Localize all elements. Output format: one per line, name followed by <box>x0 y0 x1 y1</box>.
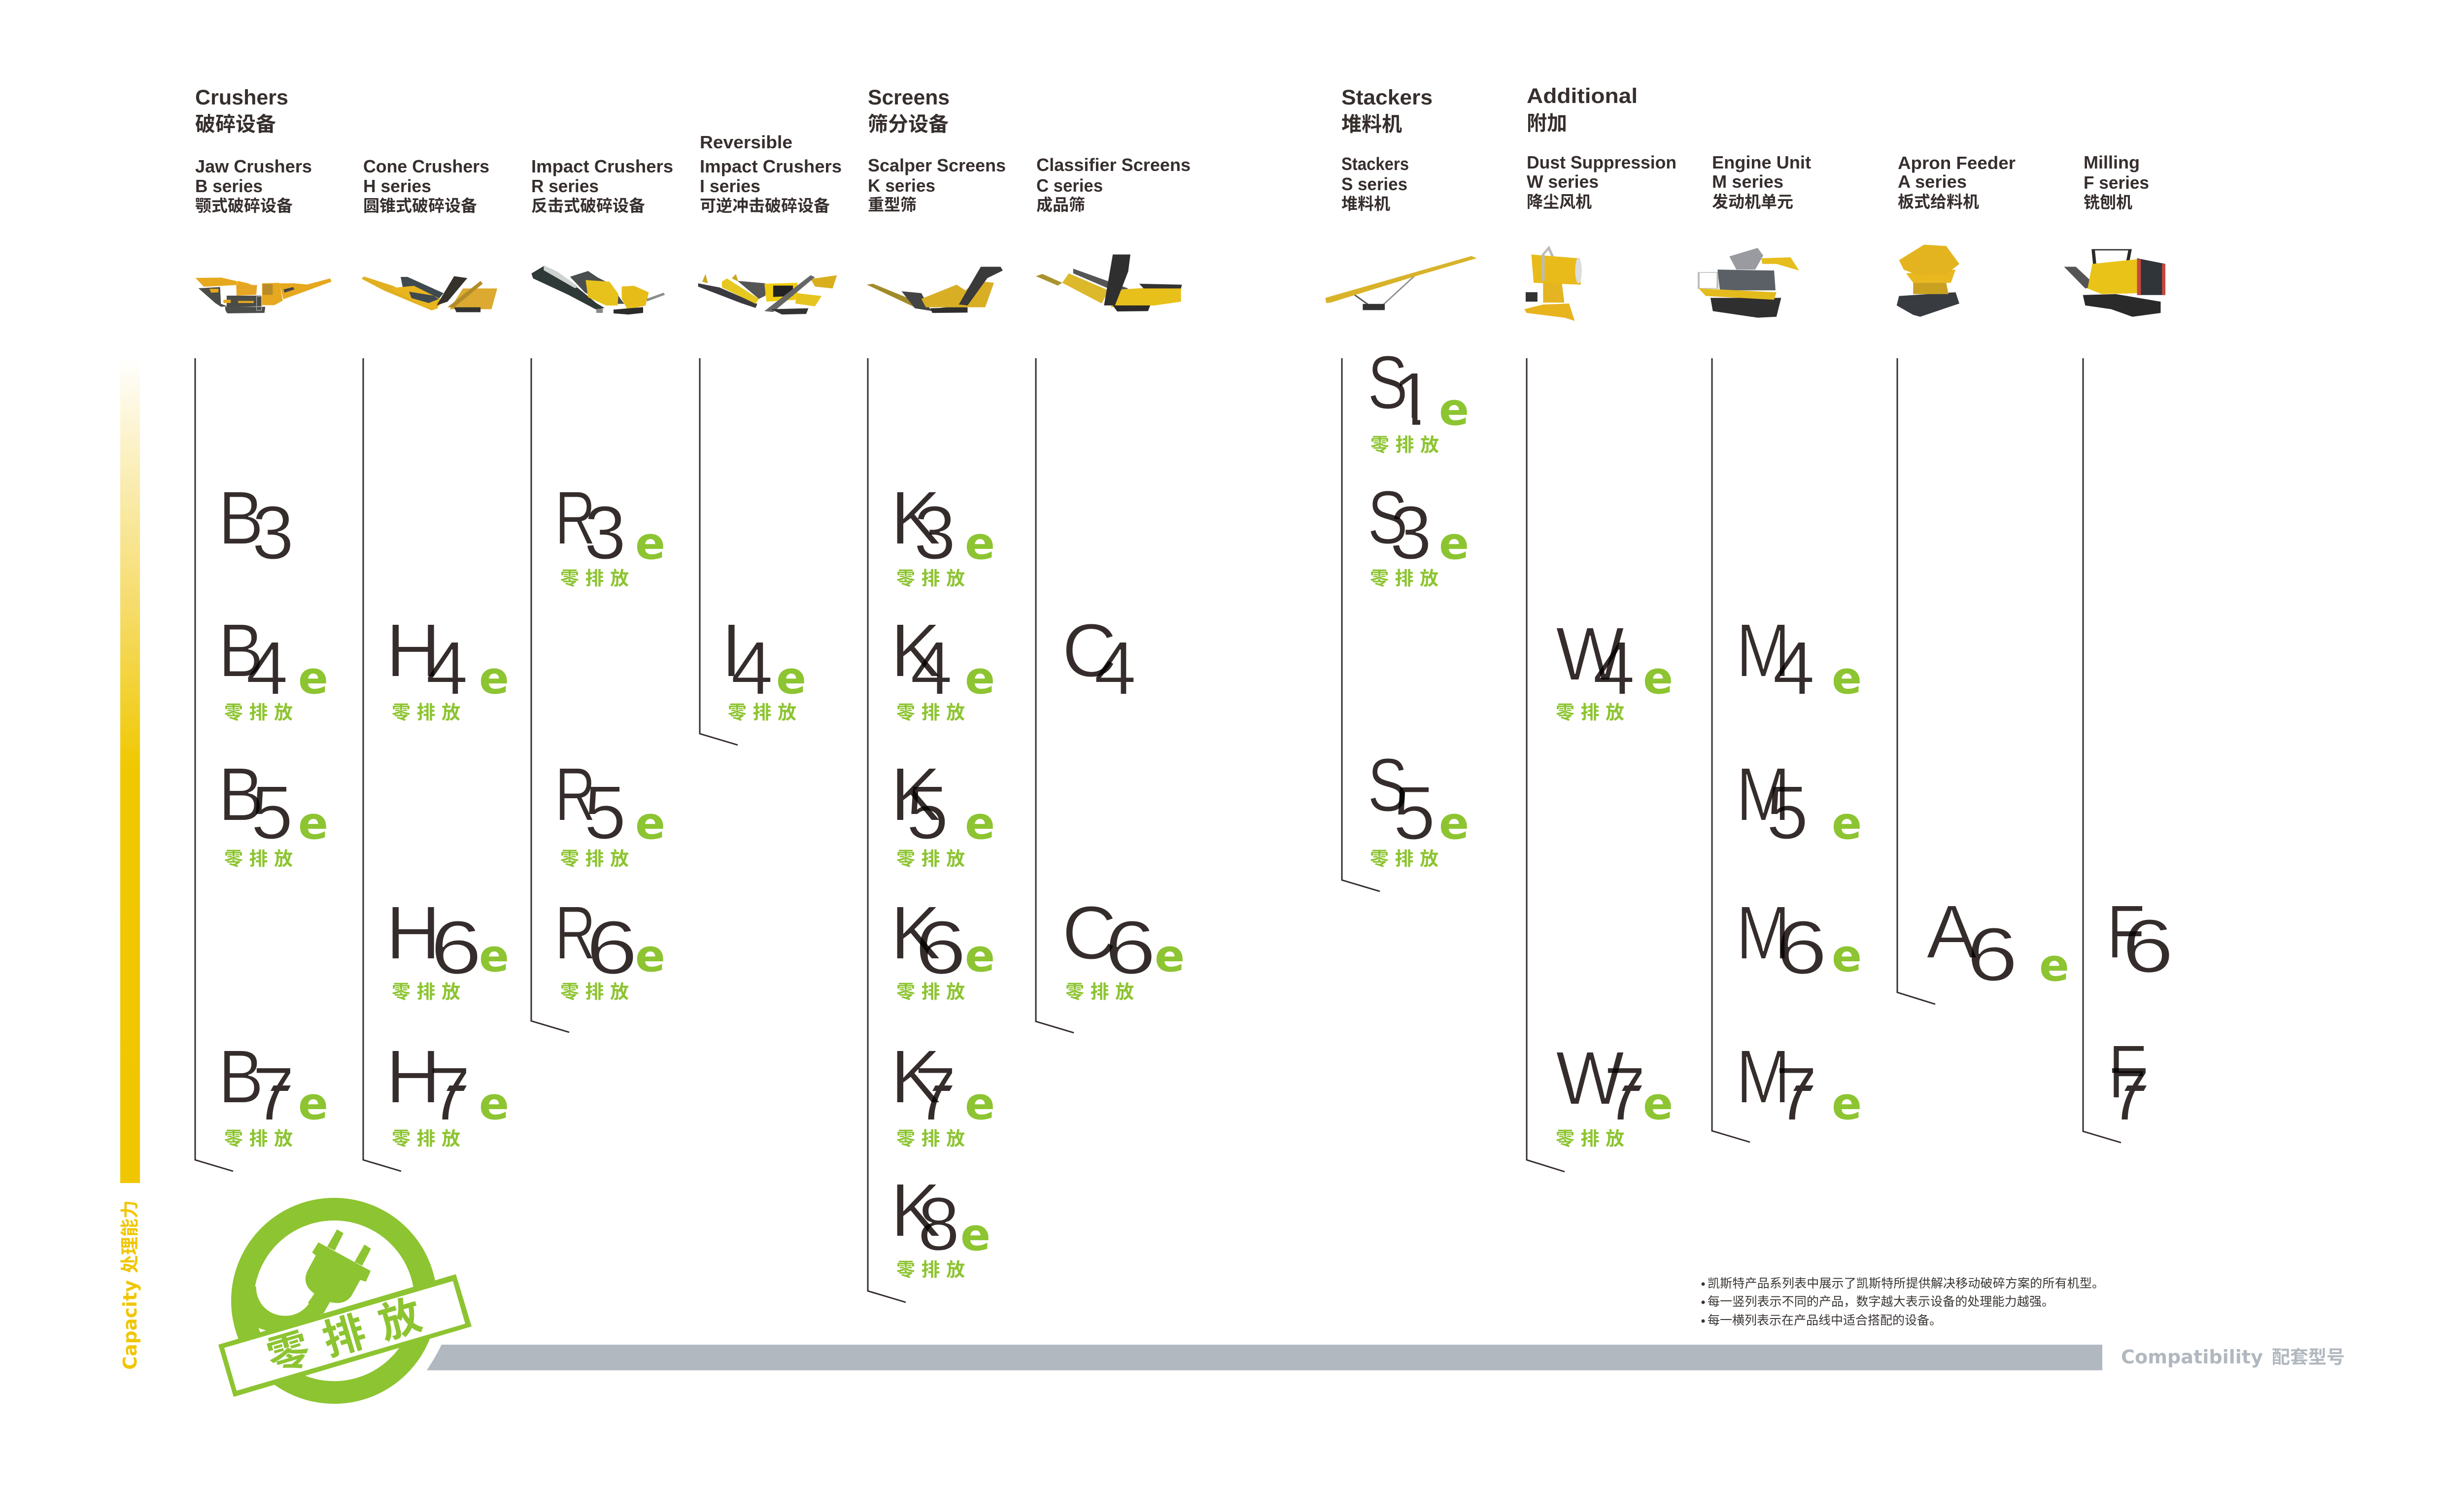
heading: Additional <box>1527 84 1638 135</box>
model: F7: 7 <box>2108 1051 2150 1136</box>
heading: Screens <box>868 86 950 136</box>
heading: Crushers <box>195 86 288 136</box>
icon: engine unit machine <box>1699 248 1799 318</box>
model: C6: 零排放 <box>1065 982 1140 1003</box>
model: F6: F <box>2107 889 2145 974</box>
model: K5: K <box>890 752 941 837</box>
model: B4: 零排放 <box>224 703 299 723</box>
column bracket: B series <box>195 358 233 1171</box>
column bracket: S series <box>1342 358 1380 891</box>
model: K5: e <box>965 798 995 849</box>
model: K8: 8 <box>918 1182 960 1266</box>
model: R5: 5 <box>584 770 626 855</box>
icon: stacker machine <box>1325 256 1477 310</box>
model: R3: 3 <box>584 490 626 575</box>
model: K4: 4 <box>910 626 953 711</box>
model: B4: B <box>218 608 264 693</box>
model: B4 <box>218 608 328 723</box>
model: F6: 6 <box>2122 904 2174 988</box>
column heading: Apron Feeder <box>1898 153 2016 211</box>
model: S5 <box>1368 743 1469 870</box>
model: I4: I <box>721 608 742 693</box>
column heading: Impact Crushers <box>531 156 673 215</box>
icon: scalper screen machine <box>867 267 1003 313</box>
model: K3: e <box>965 518 995 570</box>
model: S1: S <box>1368 340 1408 425</box>
model: A6 <box>1926 889 2069 997</box>
model: W4: 零排放 <box>1556 703 1631 723</box>
column bracket: F series <box>2083 358 2121 1143</box>
model: I4 <box>721 608 806 723</box>
model: K6: K <box>890 890 941 975</box>
model: A6: A <box>1926 889 1977 974</box>
model: S5: S <box>1368 743 1408 827</box>
model: R6: e <box>635 930 665 982</box>
model: R6: R <box>555 890 596 975</box>
model: W7: 7 <box>1604 1051 1646 1136</box>
model: K7 <box>890 1034 995 1150</box>
model: W7: W <box>1556 1036 1624 1120</box>
model: K6: e <box>965 930 995 982</box>
badge text: 零排放 <box>262 1287 443 1382</box>
model: B5: 零排放 <box>224 849 299 870</box>
model: B5: B <box>218 752 264 837</box>
model: K8: e <box>960 1209 991 1261</box>
column heading: Scalper Screens: Scalper Screens <box>868 155 1006 175</box>
model: M4: 4 <box>1773 626 1815 711</box>
model: S3: 3 <box>1390 490 1432 575</box>
model: R5 <box>555 752 665 870</box>
column bracket: M series <box>1712 358 1750 1142</box>
model: R6: 零排放 <box>560 982 635 1003</box>
column heading: Impact Crushers: 反击式破碎设备 <box>531 197 645 215</box>
column heading: Jaw Crushers: 颚式破碎设备 <box>195 197 293 215</box>
model: H6: e <box>479 930 509 982</box>
model: K7: 零排放 <box>896 1129 971 1150</box>
model: B5: 5 <box>251 770 293 855</box>
model: S3: 零排放 <box>1370 569 1445 589</box>
model: M5: 5 <box>1766 770 1809 855</box>
model: K3: 3 <box>914 490 956 575</box>
model: K8: 零排放 <box>896 1260 971 1281</box>
column heading: Apron Feeder: Apron Feeder <box>1898 153 2016 173</box>
column heading: Impact Crushers: Impact Crushers <box>531 156 673 176</box>
model: K7: e <box>965 1078 995 1130</box>
model: M7: 7 <box>1775 1051 1817 1136</box>
heading: Additional: Additional <box>1527 84 1638 108</box>
model: K8 <box>890 1168 991 1281</box>
icon: dust suppression machine <box>1524 248 1582 321</box>
icon: milling machine <box>2064 250 2165 317</box>
model: H6: H <box>386 890 441 975</box>
column heading: Scalper Screens: K series <box>868 175 935 196</box>
column heading: Reversible Impact Crushers: I series <box>700 176 760 196</box>
column heading: Milling: Milling <box>2084 152 2140 172</box>
model: S3: e <box>1439 518 1469 570</box>
column heading: Cone Crushers: 圆锥式破碎设备 <box>363 197 477 215</box>
model: M6: e <box>1832 930 1862 982</box>
panel: screens header <box>868 86 1191 214</box>
model: M5 <box>1736 752 1862 855</box>
model: B7: B <box>218 1034 264 1119</box>
model: S5: e <box>1439 798 1469 849</box>
model: C4 <box>1062 608 1136 711</box>
column heading: Cone Crushers <box>363 156 489 215</box>
model: K6: 6 <box>915 905 966 990</box>
model: S5: 零排放 <box>1370 849 1445 870</box>
column heading: Stackers S series: S series <box>1341 174 1407 194</box>
model: M5: e <box>1832 798 1862 849</box>
icon: apron feeder machine <box>1897 245 1959 317</box>
column heading: Classifier Screens <box>1036 155 1191 214</box>
column heading: Milling <box>2084 152 2149 211</box>
model: R3: 零排放 <box>560 569 635 589</box>
compatibility bar <box>427 1345 2102 1370</box>
column heading: Dust Suppression: 降尘风机 <box>1527 193 1592 211</box>
model: M6: 6 <box>1776 905 1827 990</box>
model: W4: W <box>1556 611 1624 696</box>
column heading: Milling: F series <box>2084 172 2149 193</box>
model: R3: e <box>635 518 665 570</box>
model: H6: 零排放 <box>392 982 467 1003</box>
model: H7: 零排放 <box>392 1129 467 1150</box>
heading: Additional: 附加 <box>1527 112 1567 135</box>
column heading: Engine Unit: M series <box>1712 171 1783 192</box>
model: H4: 零排放 <box>392 703 467 723</box>
heading: Screens: 筛分设备 <box>868 113 949 136</box>
column heading: Stackers S series: 堆料机 <box>1341 195 1390 213</box>
model: K4: 零排放 <box>896 703 971 723</box>
model: K5 <box>890 752 995 870</box>
column bracket: I series <box>700 358 738 745</box>
model: H7 <box>386 1034 509 1150</box>
model: R6: 6 <box>586 905 638 990</box>
column heading: Cone Crushers: Cone Crushers <box>363 156 489 176</box>
column bracket: C series <box>1036 358 1074 1033</box>
model: B5 <box>218 752 328 870</box>
column bracket: K series <box>868 358 906 1302</box>
model: C6: e <box>1155 930 1185 982</box>
column heading: Reversible Impact Crushers: Reversible <box>700 132 792 152</box>
model: K7: K <box>890 1034 941 1119</box>
column heading: Classifier Screens: Classifier Screens <box>1036 155 1191 175</box>
model: K6 <box>890 890 995 1003</box>
heading: Crushers: 破碎设备 <box>195 113 276 136</box>
model: H7: e <box>479 1078 509 1130</box>
panel: crushers header <box>195 86 842 215</box>
column heading: Jaw Crushers: Jaw Crushers <box>195 156 312 176</box>
model: A6: e <box>2039 940 2069 991</box>
model: H4: e <box>479 652 509 704</box>
capacity label: Capacity <box>119 1280 141 1370</box>
column heading: Engine Unit: 发动机单元 <box>1712 193 1793 211</box>
column heading: Impact Crushers: R series <box>531 176 599 196</box>
capacity label <box>119 1200 141 1370</box>
column heading: Dust Suppression: W series <box>1527 171 1599 192</box>
model: C4: 4 <box>1094 626 1136 711</box>
model: B7: 7 <box>252 1051 295 1136</box>
model: B7: 零排放 <box>224 1129 299 1150</box>
model: I4: 4 <box>731 626 773 711</box>
column heading: Dust Suppression: Dust Suppression <box>1527 152 1677 172</box>
column heading: Engine Unit: Engine Unit <box>1712 152 1811 172</box>
model: R5: e <box>635 798 665 849</box>
model: M7: M <box>1736 1034 1790 1119</box>
model: R6 <box>555 890 665 1003</box>
model: K3 <box>890 475 995 589</box>
model: C6 <box>1062 890 1185 1003</box>
model: M6: M <box>1736 890 1790 975</box>
model: C4: C <box>1062 608 1117 693</box>
model: C6: C <box>1062 890 1117 975</box>
column heading: Stackers S series: Stackers <box>1341 154 1409 174</box>
model: I4: e <box>776 652 806 704</box>
model: B3 <box>218 475 294 575</box>
model: H4: H <box>386 608 441 693</box>
heading: Stackers: Stackers <box>1341 86 1433 109</box>
model: M7 <box>1736 1034 1862 1136</box>
column heading: Reversible Impact Crushers: 可逆冲击破碎设备 <box>700 197 830 215</box>
notes: 每一竖列表示不同的产品，数字越大表示设备的处理能力越强。 <box>1708 1295 2054 1309</box>
model: K6: 零排放 <box>896 982 971 1003</box>
column bracket: H series <box>363 358 401 1171</box>
notes: 每一横列表示在产品线中适合搭配的设备。 <box>1708 1314 1942 1327</box>
model: B3: B <box>218 475 264 560</box>
model: R5: R <box>555 752 596 837</box>
icon: plug and cord <box>240 1229 371 1331</box>
model: S3: S <box>1368 475 1408 560</box>
model: K8: K <box>890 1168 941 1253</box>
model: S1 <box>1368 340 1469 456</box>
model: B7 <box>218 1034 328 1150</box>
model: W7 <box>1556 1036 1673 1150</box>
icon: badge ring <box>242 1209 426 1392</box>
model: B7: e <box>298 1078 328 1130</box>
column heading: Apron Feeder: 板式给料机 <box>1898 193 1979 211</box>
model: M5: M <box>1736 752 1790 837</box>
model: B4: 4 <box>246 626 288 711</box>
model: R3 <box>555 475 665 589</box>
model: K7: 7 <box>914 1051 957 1136</box>
model: H4: 4 <box>426 626 468 711</box>
notes: 凯斯特产品系列表中展示了凯斯特所提供解决移动破碎方案的所有机型。 <box>1708 1277 2104 1290</box>
model: S1: 1 <box>1392 357 1435 441</box>
column heading: Jaw Crushers <box>195 156 312 215</box>
icon: jaw crusher machine <box>196 277 332 313</box>
panel: stackers header <box>1341 86 1433 213</box>
model: W4: 4 <box>1593 626 1635 711</box>
model: W4 <box>1556 611 1673 723</box>
model: K3: 零排放 <box>896 569 971 589</box>
model: R3: R <box>555 475 596 560</box>
column heading: Scalper Screens: 重型筛 <box>868 196 917 214</box>
column heading: Cone Crushers: H series <box>363 176 431 196</box>
model: M7: e <box>1832 1078 1862 1130</box>
model: K3: K <box>890 475 941 560</box>
notes <box>1701 1277 2104 1327</box>
model: A6: 6 <box>1966 912 2018 997</box>
column heading: Scalper Screens <box>868 155 1006 214</box>
model: S3 <box>1368 475 1469 589</box>
column bracket: R series <box>531 358 569 1032</box>
model: K5: 零排放 <box>896 849 971 870</box>
model: S1: e <box>1439 384 1469 436</box>
icon: reversible impact crusher machine <box>698 274 837 314</box>
column heading: Dust Suppression <box>1527 152 1677 211</box>
model: C6: 6 <box>1104 905 1156 990</box>
capacity bar <box>120 358 140 1183</box>
heading: Stackers: 堆料机 <box>1341 113 1402 136</box>
compatibility label: 配套型号 <box>2272 1347 2345 1367</box>
model: F7: F <box>2108 1029 2147 1114</box>
model: H7: H <box>386 1034 441 1119</box>
icon: cone crusher machine <box>362 276 497 312</box>
column heading: Apron Feeder: A series <box>1898 171 1967 192</box>
icon: classifier screen machine <box>1036 255 1182 311</box>
panel: additional header <box>1527 84 2149 211</box>
model: H6: 6 <box>430 905 482 990</box>
column heading: Reversible Impact Crushers: Impact Crushers <box>700 156 842 176</box>
column heading: Classifier Screens: 成品筛 <box>1036 196 1085 214</box>
badge banner <box>218 1274 472 1397</box>
model: B3: 3 <box>252 490 294 575</box>
heading: Crushers: Crushers <box>195 86 288 109</box>
model: B5: e <box>298 798 328 849</box>
model: K4: e <box>965 652 995 704</box>
model: R5: 零排放 <box>560 849 635 870</box>
model: M6 <box>1736 890 1862 990</box>
model: W7: 零排放 <box>1556 1129 1631 1150</box>
compatibility label <box>2121 1346 2345 1368</box>
badge: zero emission <box>218 1209 472 1397</box>
icon: impact crusher machine <box>531 265 665 314</box>
column heading: Stackers S series <box>1341 154 1409 213</box>
model: S5: 5 <box>1393 771 1436 855</box>
model: I4: 零排放 <box>728 703 803 723</box>
compatibility label: Compatibility <box>2121 1346 2263 1368</box>
heading: Stackers <box>1341 86 1433 136</box>
model: K5: 5 <box>906 770 949 855</box>
model: H4 <box>386 608 509 723</box>
heading: Screens: Screens <box>868 86 950 109</box>
column bracket: W series <box>1527 358 1565 1172</box>
column heading: Reversible Impact Crushers <box>700 132 842 215</box>
model: H7: 7 <box>428 1051 471 1136</box>
column heading: Classifier Screens: C series <box>1036 175 1103 196</box>
model: M4 <box>1736 608 1862 711</box>
capacity label: 处理能力 <box>120 1200 140 1273</box>
column heading: Engine Unit <box>1712 152 1811 211</box>
model: W7: e <box>1643 1078 1673 1130</box>
model: M4: M <box>1736 608 1790 693</box>
column heading: Milling: 铣刨机 <box>2084 193 2132 211</box>
model: S1: 零排放 <box>1370 435 1445 456</box>
model: F6 <box>2107 889 2174 988</box>
model: H6 <box>386 890 509 1003</box>
model: K4 <box>890 608 995 723</box>
model: M4: e <box>1832 652 1862 704</box>
model: K4: K <box>890 608 941 693</box>
column heading: Jaw Crushers: B series <box>195 176 263 196</box>
model: B4: e <box>298 652 328 704</box>
column bracket: A series <box>1897 358 1935 1004</box>
model: W4: e <box>1643 652 1673 704</box>
